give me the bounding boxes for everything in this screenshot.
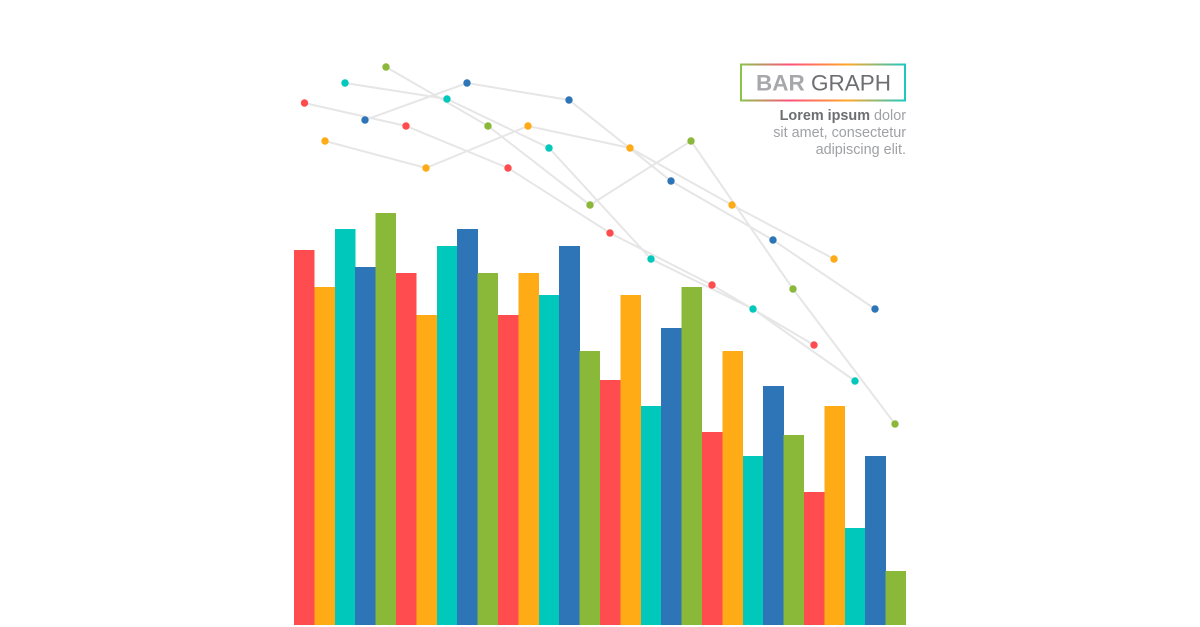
description text (773, 108, 906, 158)
bar chart (294, 213, 906, 625)
description text: adipiscing elit. (816, 142, 906, 158)
description text: sit amet, consectetur (773, 125, 906, 141)
line chart: data points (301, 63, 899, 428)
description text: Lorem ipsum dolor (780, 108, 906, 124)
title box (741, 64, 905, 100)
line chart: connecting lines (304, 67, 895, 424)
title box: BAR GRAPH (756, 70, 891, 96)
